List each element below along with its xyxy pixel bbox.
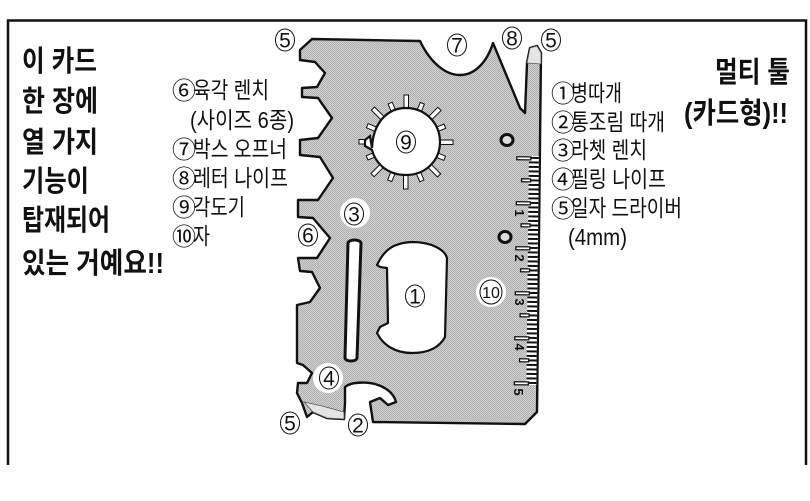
text block: right feature list: ⑤ — [551, 196, 575, 223]
callout 1: 1 — [409, 286, 421, 308]
text block: left feature list: 박스 오프너 — [193, 136, 287, 162]
callout 5 top right — [542, 29, 560, 52]
callout 4: 4 — [323, 368, 335, 390]
callout 5 bottom — [280, 412, 300, 436]
callout 8 — [502, 27, 522, 50]
callout 5 bottom: 5 — [284, 412, 296, 436]
ruler numbers: 4 — [512, 343, 527, 351]
callout 8: 8 — [506, 28, 518, 50]
text block: left feature list: ⑧ — [172, 166, 196, 193]
callout numbers — [276, 27, 560, 438]
text block: left feature list: ⑥ — [172, 78, 196, 105]
ruler numbers: 1 — [512, 209, 527, 217]
text block: right feature list: 통조림 따개 — [571, 109, 665, 135]
text block: left feature list: 각도기 — [193, 194, 245, 220]
callout 4 — [320, 367, 338, 390]
heading: left description: 기능이 — [22, 165, 89, 198]
blade tip highlights — [304, 46, 541, 419]
heading: left description: 한 장에 — [22, 85, 98, 118]
protractor ticks — [359, 95, 453, 189]
callout 6 — [298, 224, 318, 248]
callout 1 — [406, 285, 424, 308]
callout 9 — [396, 131, 416, 154]
text block: left feature list: 육각 렌치 — [193, 77, 269, 103]
text block: right feature list — [551, 80, 682, 250]
callout 5 top left — [276, 29, 294, 52]
text block: right feature list: 병따개 — [571, 80, 622, 106]
text block: right feature list: 라쳇 렌치 — [571, 137, 647, 163]
heading: left description: 탑재되어 — [22, 204, 110, 237]
text block: right feature list: ② — [551, 110, 575, 137]
text block: right feature list: (4mm) — [568, 224, 627, 250]
callout 6: 6 — [302, 224, 314, 248]
callout 9: 9 — [400, 132, 412, 154]
heading: multi tool title: (카드형)!! — [684, 97, 788, 130]
text block: right feature list: 일자 드라이버 — [571, 195, 682, 221]
callout 5 top left: 5 — [279, 30, 291, 52]
callout 7: 7 — [451, 34, 463, 58]
rivets — [499, 134, 513, 242]
multi tool card illustration — [297, 39, 541, 424]
text block: right feature list: 필링 나이프 — [571, 166, 666, 192]
callout 10 — [480, 280, 502, 304]
heading: left description: 있는 거예요!! — [22, 247, 164, 280]
text block: left feature list: 자 — [193, 223, 210, 249]
callout 10: 10 — [482, 285, 500, 302]
ruler numbers: 5 — [511, 388, 526, 396]
heading: multi tool title: 멀티 툴 — [715, 56, 790, 89]
heading: left description — [22, 45, 164, 280]
text block: left feature list: 레터 나이프 — [193, 165, 288, 191]
text block: right feature list: ③ — [551, 138, 575, 165]
text block: right feature list: ① — [551, 81, 575, 108]
callout 5 top right: 5 — [545, 30, 557, 52]
heading: multi tool title — [684, 56, 790, 130]
text block: left feature list — [172, 77, 294, 251]
callout 3 — [344, 203, 364, 226]
ruler numbers — [511, 209, 527, 396]
ruler numbers: 3 — [512, 298, 527, 306]
callout 2: 2 — [352, 414, 364, 438]
ruler — [514, 156, 539, 385]
text block: right feature list: ④ — [551, 167, 575, 194]
callout 3: 3 — [348, 204, 360, 226]
heading: left description: 열 가지 — [22, 126, 98, 159]
protractor disc — [365, 108, 440, 175]
text block: left feature list: (사이즈 6종) — [190, 107, 294, 133]
white halos behind callouts — [313, 198, 506, 393]
ratchet slot — [345, 240, 361, 361]
ruler numbers: 2 — [512, 254, 527, 262]
card body — [297, 39, 541, 424]
bottle opener hole — [377, 242, 447, 353]
heading: left description: 이 카드 — [22, 45, 97, 78]
text block: left feature list: ⑦ — [172, 137, 196, 164]
text block: left feature list: ⑨ — [172, 195, 196, 222]
callout 2 — [348, 414, 368, 438]
text block: left feature list: ⑩ — [172, 224, 196, 251]
callout 7 — [448, 34, 466, 58]
